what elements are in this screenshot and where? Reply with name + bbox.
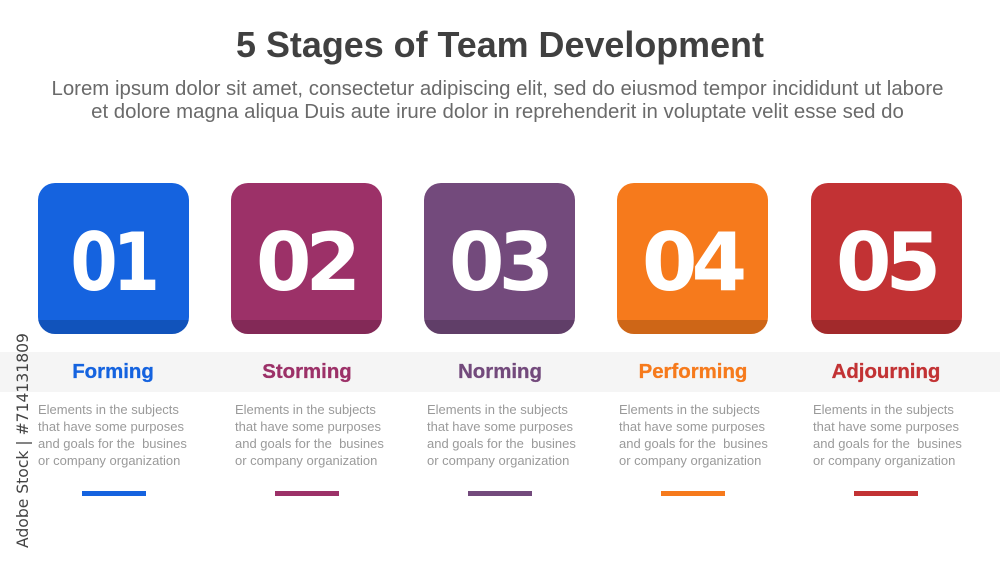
accent bar 5 xyxy=(854,491,918,496)
stock watermark id: Adobe Stock | #714131809 xyxy=(14,333,32,548)
heading: Performing: Performing xyxy=(639,361,747,383)
heading: Forming: Forming xyxy=(72,361,154,383)
accent bar 1 xyxy=(82,491,146,496)
label band xyxy=(0,352,1000,392)
text: Forming: Elements in the subjects that have some purposes and goals for the busines or company organization xyxy=(38,402,187,468)
text: Performing: Elements in the subjects that have some purposes and goals for the busines or company organization xyxy=(619,402,768,468)
accent bar 3 xyxy=(468,491,532,496)
card 03: 03 xyxy=(449,216,548,309)
accent bar 4 xyxy=(661,491,725,496)
card 04: 04 xyxy=(642,216,741,309)
card 05 xyxy=(811,183,962,334)
card 02: 02 xyxy=(256,216,355,309)
card 01: 01 xyxy=(70,216,155,309)
card 03 xyxy=(424,183,575,334)
card 04 xyxy=(617,183,768,334)
title: 5 Stages of Team Development xyxy=(236,25,764,65)
card 01 xyxy=(38,183,189,334)
heading: Storming: Storming xyxy=(262,361,352,383)
accent bar 2 xyxy=(275,491,339,496)
subtitle text: Lorem ipsum dolor sit amet, consectetur adipiscing elit, sed do eiusmod tempor incididunt ut labore et dolore magna aliqua Duis aute irure dolor in reprehenderit in voluptate velit esse sed do xyxy=(52,78,943,122)
text: Norming: Elements in the subjects that have some purposes and goals for the busines or company organization xyxy=(427,402,576,468)
heading: Norming: Norming xyxy=(458,361,542,383)
text: Adjourning: Elements in the subjects that have some purposes and goals for the busines or company organization xyxy=(813,402,962,468)
heading: Adjourning: Adjourning xyxy=(832,361,940,383)
text: Storming: Elements in the subjects that have some purposes and goals for the busines or company organization xyxy=(235,402,384,468)
card 02 xyxy=(231,183,382,334)
card 05: 05 xyxy=(836,216,935,309)
